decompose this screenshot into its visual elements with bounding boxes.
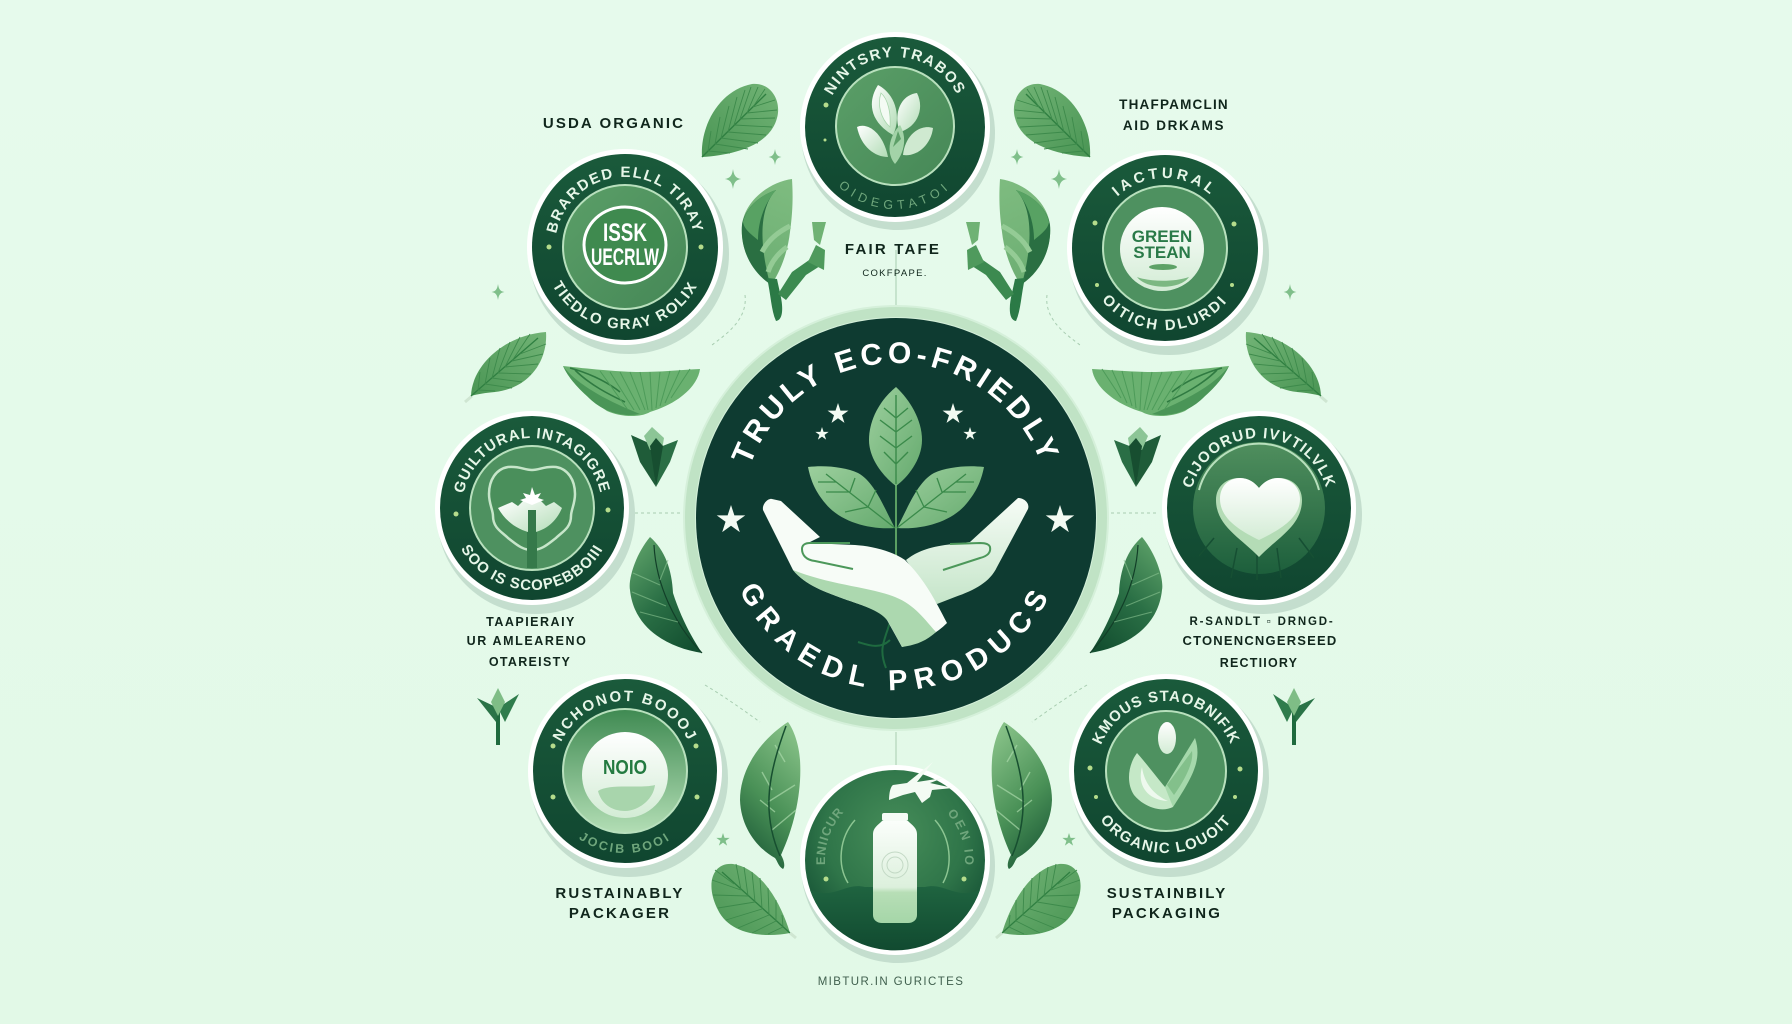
icon: seal with lettering — [584, 207, 666, 283]
icon: lotus in scalloped frame — [489, 467, 575, 568]
connector lines — [635, 250, 1158, 768]
label: left caption: OTAREISTY — [489, 655, 571, 669]
label: right caption: RECTIIORY — [1220, 656, 1298, 670]
leaf: upper left round — [702, 84, 778, 157]
label: left caption: TAAPIERAIY — [486, 615, 576, 629]
icon: noio seal — [582, 732, 668, 818]
badge: bottom bottle — [800, 762, 995, 963]
label: usda organic: USDA ORGANIC — [543, 115, 685, 132]
badge text lower: JOCIB BOOI — [580, 832, 669, 853]
icon: green stean seal: STEAN — [1133, 243, 1191, 262]
leaf: wide right — [1092, 366, 1229, 416]
badge text: IACTURAL — [1112, 168, 1212, 196]
leaf: bottom round right — [996, 864, 1081, 938]
label: upper right: AID DRKAMS — [1123, 118, 1225, 133]
label: upper right — [1119, 97, 1229, 133]
leaf: wide left — [563, 366, 700, 416]
badge text: NINTSRY TRABOS — [824, 46, 964, 95]
leaf: upper right round — [1014, 84, 1090, 157]
label: left caption: UR AMLEARENO — [467, 634, 587, 648]
cupped hands — [763, 498, 1028, 668]
label: fair tafe: FAIR TAFE — [845, 241, 941, 258]
icon: green stean seal — [1120, 207, 1204, 291]
icon: noio seal: NOIO — [603, 757, 647, 779]
badge text: NCHONOT BOOOJ — [552, 690, 696, 742]
central emblem — [683, 305, 1109, 731]
icon: bottle with splash — [873, 762, 953, 923]
emblem disc — [696, 318, 1096, 718]
badge text lower: TIEDLO GRAY ROLIX — [554, 280, 697, 329]
main title top arc: TRULY ECO-FRIEDLY — [730, 342, 1060, 460]
leaf: tall left with ribbon — [742, 179, 826, 321]
badge text: BRARDED ELLL TIRAY — [546, 166, 704, 233]
main title bottom arc: GRAEDL PRODUCS — [742, 584, 1046, 690]
label: bottom caption: MIBTUR.IN GURICTES — [818, 976, 964, 988]
badge: lower left — [528, 674, 728, 877]
label: right caption: CTONENCNGERSEED — [1182, 633, 1338, 648]
tiny plant left — [477, 688, 519, 745]
emblem ring — [683, 305, 1109, 731]
sprout right — [1114, 427, 1161, 487]
icon: seal with lettering: ISSK — [603, 219, 647, 247]
badge text lower: ORGANIC LOUOIT — [1102, 814, 1229, 854]
tiny plant right — [1273, 688, 1315, 745]
leaf: lower tall left — [740, 722, 800, 869]
label: sustainbily packaging: PACKAGING — [1112, 905, 1222, 922]
badge: lower right — [1069, 674, 1269, 877]
badge: top botanical — [800, 32, 995, 230]
label: rustainably packager: PACKAGER — [569, 905, 671, 922]
badge text: CIJOORUD IVVTILVLK — [1183, 428, 1336, 488]
icon: rays — [1199, 538, 1314, 580]
badge text lower: OIDEGTATOI — [840, 182, 947, 209]
badge text lower: OITICH DLURDI — [1104, 295, 1226, 330]
label: sustainbily packaging: SUSTAINBILY — [1107, 885, 1227, 902]
sprout left — [631, 427, 678, 487]
label: rustainably packager — [555, 885, 685, 922]
label: right caption — [1182, 616, 1338, 670]
label: left caption — [467, 615, 587, 669]
emblem stars — [717, 403, 1074, 532]
badge: upper right — [1067, 150, 1269, 355]
badge: left cultural — [435, 411, 635, 614]
icon: seed and check leaf — [1129, 722, 1197, 809]
leaf: dark right — [1090, 537, 1162, 653]
icon: green stean seal: GREEN — [1132, 227, 1192, 246]
label: right caption: R-SANDLT ▫ DRNGD- — [1190, 616, 1334, 628]
icon: seal with lettering: UECRLW — [591, 244, 659, 271]
badge side text left: ENIICUR — [816, 808, 844, 864]
leaf: bottom round left — [711, 864, 796, 938]
leaf: lower tall right — [992, 722, 1052, 869]
badge text: KMOUS STAOBNIFIK — [1092, 690, 1240, 744]
badge side text right: OEN IO — [949, 810, 974, 864]
label: upper right: THAFPAMCLIN — [1119, 97, 1229, 112]
icon: heart — [1216, 478, 1302, 557]
leaf: dark left — [630, 537, 702, 653]
badge text: GUILTURAL INTAGIGRE — [454, 428, 610, 492]
icon: white leaves — [857, 85, 933, 164]
leaf: tall right with ribbon — [966, 179, 1050, 321]
badge: right heart — [1162, 411, 1362, 614]
badge: upper left — [527, 149, 729, 354]
label: sustainbily packaging — [1107, 885, 1227, 922]
plant with three leaves — [808, 387, 984, 560]
badge text lower: SOO IS SCOPEBBOIII — [462, 544, 602, 590]
leaf: small right — [1246, 332, 1327, 402]
leaf: small left — [465, 332, 546, 402]
label: fair tafe sub: COKFPAPE. — [862, 268, 928, 279]
sparkle accents — [492, 149, 1296, 846]
label: rustainably packager: RUSTAINABLY — [555, 885, 685, 902]
